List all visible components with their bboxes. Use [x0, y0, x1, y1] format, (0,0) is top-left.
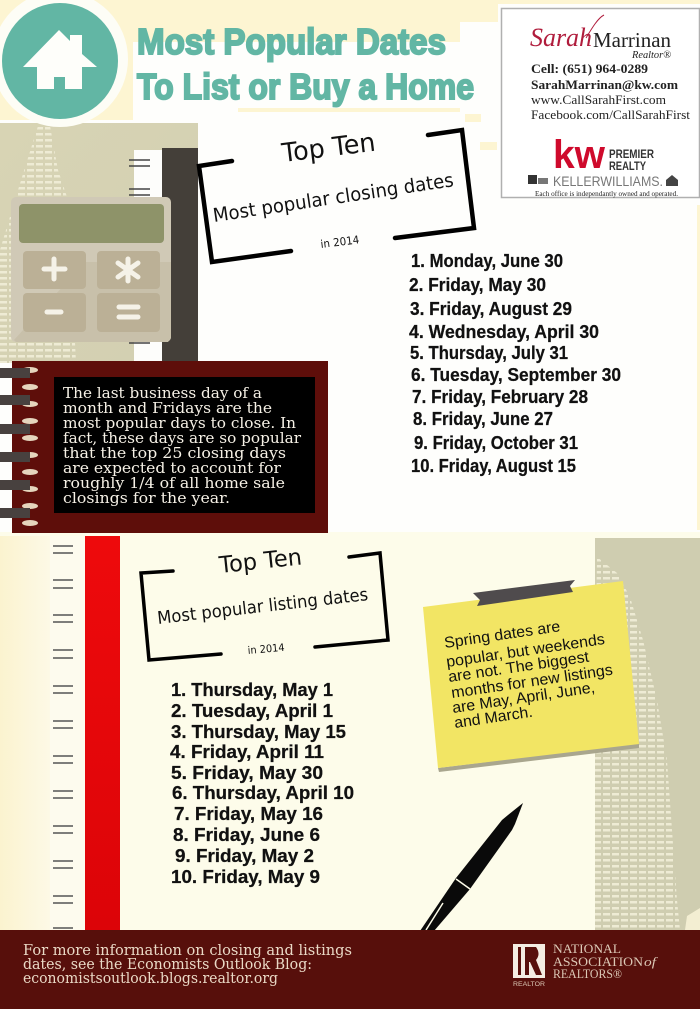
business card: Facebook.com/CallSarahFirst [531, 108, 691, 122]
tape [473, 580, 575, 606]
icon: house badge [0, 0, 128, 127]
closing note text: The last business day of a [63, 386, 262, 402]
sticky note [423, 580, 639, 772]
closing dates list: 9. Friday, October 31 [414, 433, 578, 453]
notebook spirals: top [129, 160, 150, 343]
listing dates list: 5. Friday, May 30 [171, 763, 323, 783]
notebook spine: top [162, 148, 198, 533]
listing dates list: 7. Friday, May 16 [174, 804, 323, 824]
listing dates heading: Most popular listing dates [156, 585, 369, 629]
closing dates list [409, 251, 621, 476]
footer text: economistsoutlook.blogs.realtor.org [23, 969, 278, 987]
listing dates list: 8. Friday, June 6 [173, 825, 320, 845]
business card: Marrinan [593, 28, 671, 52]
sticky note text: are May, April, June, [451, 679, 596, 717]
listing dates list [170, 680, 354, 887]
listing dates list: 1. Thursday, May 1 [171, 680, 333, 700]
business card: KELLERWILLIAMS. [553, 173, 663, 189]
footer text: For more information on closing and listings [23, 941, 352, 959]
closing note text: fact, these days are so popular [63, 431, 301, 447]
sticky note text: Spring dates are [443, 618, 561, 652]
tan skyline panel: top [0, 123, 198, 365]
closing dates heading: Top Ten [279, 128, 377, 169]
listing dates list: 2. Tuesday, April 1 [171, 701, 333, 721]
closing note text: month and Fridays are the [63, 401, 272, 417]
closing dates list: 3. Friday, August 29 [410, 299, 572, 319]
listing dates list: 6. Thursday, April 10 [172, 783, 354, 803]
closing dates list: 6. Tuesday, September 30 [411, 365, 621, 385]
realtor logo: NATIONAL [553, 941, 621, 956]
closing dates heading: Most popular closing dates [211, 169, 455, 227]
realtor logo [513, 941, 659, 988]
title: To List or Buy a Home [137, 66, 474, 107]
closing note text [63, 386, 301, 507]
realtor logo: of [644, 954, 659, 969]
business card: REALTY [609, 159, 646, 173]
listing dates list: 4. Friday, April 11 [170, 742, 324, 762]
realtor logo: REALTOR [513, 981, 545, 988]
closing dates list: 8. Friday, June 27 [413, 409, 553, 429]
panel: closing note [0, 361, 328, 533]
listing dates heading: Top Ten [217, 544, 303, 579]
notebook spirals: bottom [53, 546, 73, 928]
business card: PREMIER [609, 147, 654, 161]
closing dates heading [199, 128, 474, 262]
closing note text: that the top 25 closing days [63, 446, 286, 462]
closing dates list: 7. Friday, February 28 [412, 387, 588, 407]
business card: Sarah [530, 23, 592, 52]
spiral rings [0, 367, 38, 526]
red notebook spine [85, 536, 120, 931]
business card: SarahMarrinan@kw.com [531, 78, 679, 92]
listing dates heading [141, 544, 388, 660]
tan skyline panel: bottom [595, 538, 700, 930]
realtor logo: REALTORS® [553, 966, 622, 981]
listing dates list: 9. Friday, May 2 [175, 846, 314, 866]
sticky note text [443, 618, 614, 732]
business card: Realtor® [631, 50, 671, 61]
business card: Each office is independantly owned and operated. [535, 189, 678, 198]
sticky note text: and March. [453, 704, 534, 732]
closing note text: most popular days to close. In [63, 416, 296, 432]
title [137, 21, 474, 107]
sticky note text: popular, but weekends [445, 631, 606, 671]
listing dates list: 10. Friday, May 9 [171, 867, 320, 887]
icon: pen [420, 803, 523, 931]
closing dates list: 2. Friday, May 30 [409, 275, 546, 295]
listing dates heading: in 2014 [247, 642, 285, 657]
closing dates list: 1. Monday, June 30 [411, 251, 563, 271]
footer text: dates, see the Economists Outlook Blog: [23, 955, 312, 973]
sticky note text: are not. The biggest [447, 649, 591, 686]
title: Most Popular Dates [137, 21, 446, 62]
closing note text: are expected to account for [63, 461, 281, 477]
closing note text: closings for the year. [63, 491, 230, 507]
footer [0, 930, 700, 1009]
realtor logo: ASSOCIATION [553, 954, 644, 969]
business card: www.CallSarahFirst.com [531, 93, 666, 107]
footer text [23, 941, 352, 987]
listing dates list: 3. Thursday, May 15 [171, 722, 346, 742]
closing dates list: 5. Thursday, July 31 [410, 343, 568, 363]
closing dates heading: in 2014 [320, 233, 360, 251]
business card: Cell: (651) 964-0289 [531, 62, 648, 76]
business card [502, 8, 700, 198]
sticky note text: months for new listings [450, 662, 614, 702]
closing dates list: 10. Friday, August 15 [411, 456, 576, 476]
business card: kw [553, 133, 606, 177]
icon: calculator [11, 197, 171, 342]
closing dates list: 4. Wednesday, April 30 [409, 322, 599, 342]
closing note text: roughly 1/4 of all home sale [63, 476, 285, 492]
